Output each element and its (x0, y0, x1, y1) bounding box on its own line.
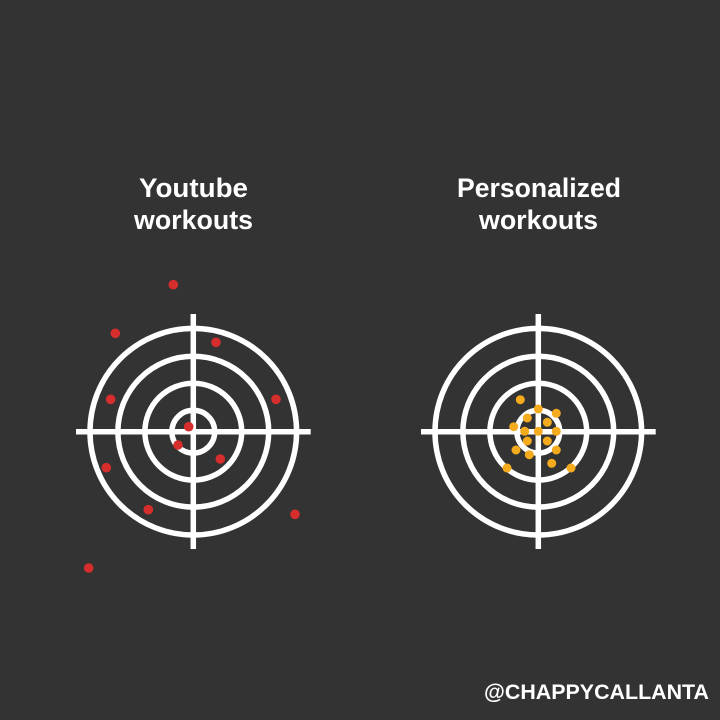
panel: Youtube workouts target (76, 280, 311, 573)
target rings and crosshair, left (76, 314, 311, 549)
credit handle: @CHAPPYCALLANTA (484, 681, 709, 704)
scattered red shots (84, 280, 300, 573)
clustered yellow shots (502, 395, 576, 472)
heading: Personalized workouts (457, 173, 621, 235)
heading: Personalized workouts: workouts (478, 205, 598, 235)
heading: Youtube workouts: workouts (133, 205, 253, 235)
target rings and crosshair, right (421, 314, 656, 549)
heading: Youtube workouts (133, 173, 253, 235)
panel: Personalized workouts target (421, 314, 656, 549)
heading: Personalized workouts: Personalized (457, 173, 621, 203)
heading: Youtube workouts: Youtube (139, 173, 248, 203)
